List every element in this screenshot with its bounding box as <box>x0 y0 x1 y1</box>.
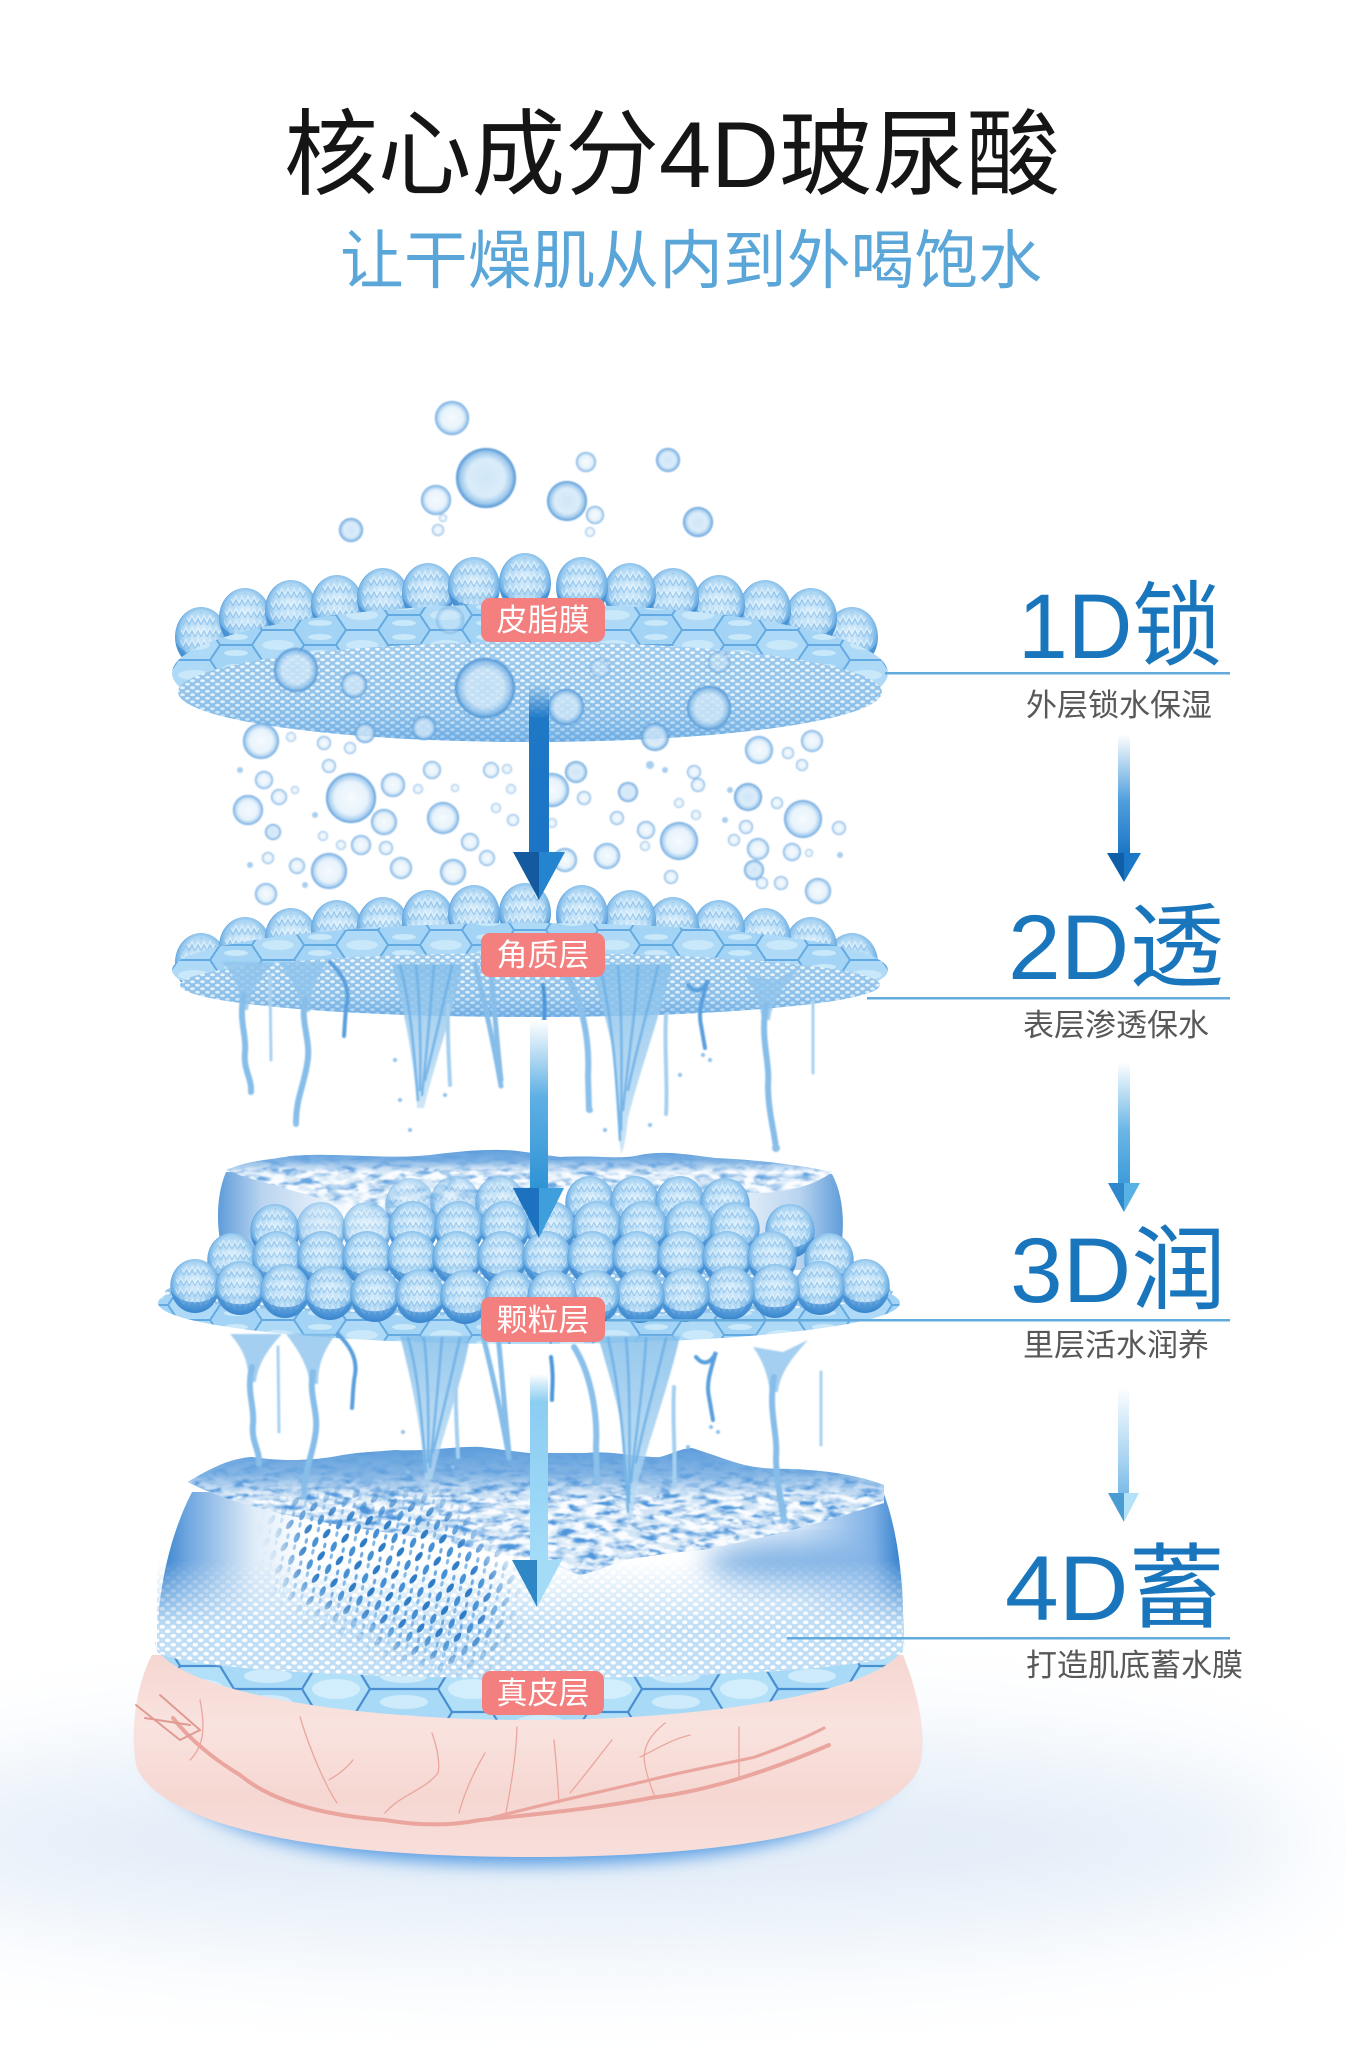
layer label: 颗粒层: 颗粒层 <box>496 1303 590 1338</box>
step 4D: store: 打造肌底蓄水膜 <box>1026 1648 1243 1683</box>
mesh surface <box>180 953 880 1017</box>
step 3D: moisturize: 3D润 <box>1010 1220 1226 1322</box>
layer label: 真皮层 <box>482 1671 604 1715</box>
right-side shaded wave <box>705 1543 875 1587</box>
arrow: 2D to 3D <box>1108 1062 1140 1212</box>
layer label: 角质层: 角质层 <box>496 938 590 973</box>
disc bubbles <box>274 606 731 751</box>
water surface <box>185 1440 890 1580</box>
step 3D: moisturize <box>607 1220 1230 1363</box>
stacked spheres <box>170 1176 890 1324</box>
water drips under layer 3 <box>230 1334 821 1526</box>
sphere row <box>175 883 878 993</box>
hexagon band <box>155 1640 905 1720</box>
blood vessels <box>136 1695 829 1824</box>
arrow 3: layer 3 to layer 4 <box>512 1374 562 1607</box>
layer 4: dermis base <box>134 1655 922 1864</box>
hexagon rim <box>158 1262 900 1344</box>
step 3D: moisturize: 里层活水润养 <box>1023 1328 1209 1363</box>
mesh surface <box>165 1268 893 1316</box>
step 1D: lock: 外层锁水保湿 <box>1026 688 1212 723</box>
bubbles between layers 1 and 2 <box>233 723 846 905</box>
water gradient volume <box>157 1492 903 1678</box>
water body <box>218 1172 843 1270</box>
layer label: 皮脂膜 <box>481 598 605 642</box>
step 1D: lock <box>885 576 1230 723</box>
layer label: 颗粒层 <box>481 1297 605 1342</box>
base shadow <box>150 1740 908 1864</box>
hexagon rim <box>172 923 888 1017</box>
mesh floor <box>157 1563 903 1678</box>
arrow: 1D to 2D <box>1107 734 1141 882</box>
dermis body <box>134 1655 922 1857</box>
layer label: 角质层 <box>481 933 605 977</box>
subtitle: 让干燥肌从内到外喝饱水 <box>340 225 1042 297</box>
title: 核心成分4D玻尿酸 <box>284 102 1060 207</box>
layer 2: stratum corneum disc <box>172 883 888 1154</box>
illustration: falling water bubbles <box>339 401 713 542</box>
step 2D: penetrate: 2D透 <box>1008 897 1224 999</box>
step 1D: lock: 1D锁 <box>1018 576 1222 678</box>
water body above dermis <box>150 1440 910 1720</box>
step 4D: store <box>787 1538 1243 1683</box>
step 4D: store: 4D蓄 <box>1005 1538 1225 1640</box>
arrow 1: layer 1 to layer 2 <box>513 684 565 900</box>
mesh surface <box>178 642 882 742</box>
hexagon rim <box>172 604 888 742</box>
water drips <box>222 962 813 1154</box>
background glow <box>0 1735 1310 1945</box>
layer 3: granular layer disc <box>158 1176 900 1344</box>
water surface <box>226 1150 832 1218</box>
arrow 2: layer 2 to layer 3 <box>513 1020 564 1238</box>
water under layer 3 <box>218 1145 843 1270</box>
layer 1: sebum membrane disc <box>172 553 888 751</box>
step 2D: penetrate <box>867 897 1230 1043</box>
step 2D: penetrate: 表层渗透保水 <box>1023 1008 1209 1043</box>
layer label: 皮脂膜: 皮脂膜 <box>496 603 590 638</box>
falling droplets <box>264 1480 524 1678</box>
arrow: 3D to 4D <box>1108 1387 1139 1522</box>
sphere row <box>175 553 878 667</box>
layer label: 真皮层: 真皮层 <box>496 1676 590 1711</box>
